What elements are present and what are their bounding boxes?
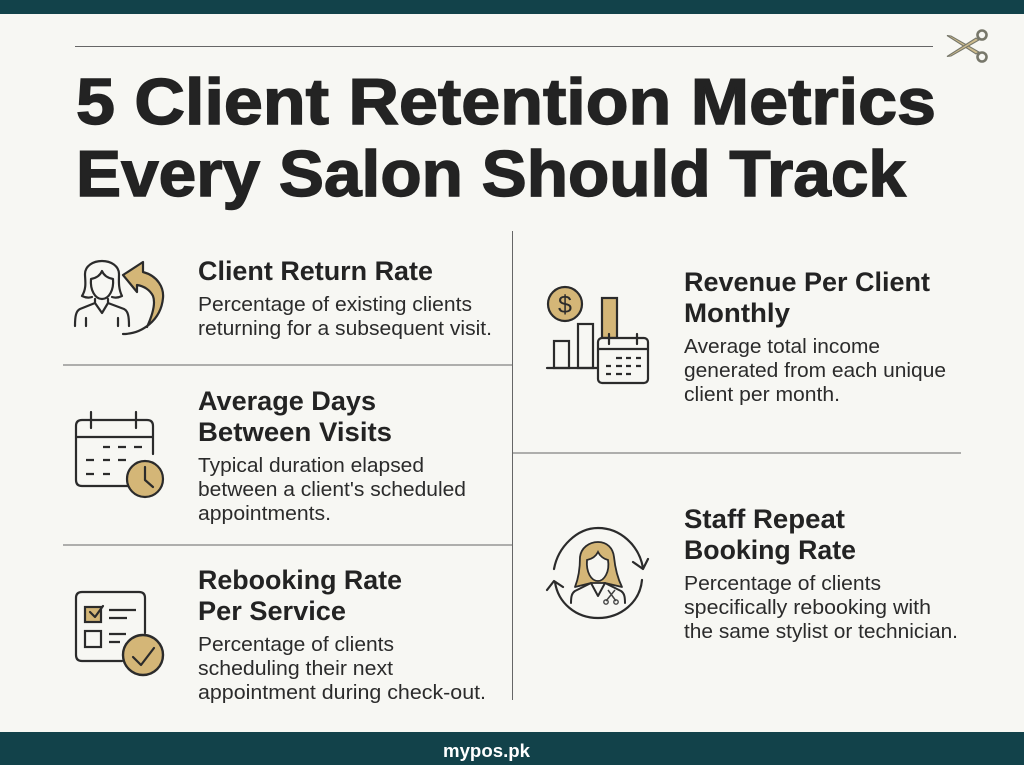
description — [198, 634, 486, 704]
icon: calendar with clock — [76, 412, 163, 497]
heading: Rebooking Rate — [198, 565, 402, 595]
description — [198, 455, 466, 525]
top bar — [0, 0, 1024, 14]
description: appointment during check-out. — [198, 682, 486, 704]
title — [76, 65, 936, 210]
description: Typical duration elapsed — [198, 455, 424, 477]
description: client per month. — [684, 384, 840, 406]
description: scheduling their next — [198, 658, 393, 680]
heading: Between Visits — [198, 417, 392, 447]
title: Every Salon Should Track — [76, 137, 907, 210]
heading: Client Return Rate — [198, 256, 433, 286]
heading — [198, 565, 402, 626]
heading: Revenue Per Client — [684, 267, 930, 297]
icon: client with return arrow — [75, 261, 163, 334]
panel: revenue per client monthly — [547, 267, 946, 406]
icon: coin, bars and calendar — [547, 287, 648, 383]
icon: stylist in circular arrows — [547, 528, 648, 618]
icon: scissors — [947, 30, 986, 62]
description: the same stylist or technician. — [684, 621, 958, 643]
description: appointments. — [198, 503, 331, 525]
icon: coin, bars and calendar: $ — [558, 291, 572, 319]
description: Percentage of existing clients — [198, 294, 472, 316]
footer bar — [0, 732, 1024, 765]
heading — [684, 504, 856, 565]
heading: Booking Rate — [684, 535, 856, 565]
description: between a client's scheduled — [198, 479, 466, 501]
description: returning for a subsequent visit. — [198, 318, 492, 340]
description: Average total income — [684, 336, 880, 358]
title: 5 Client Retention Metrics — [76, 65, 936, 138]
heading: Per Service — [198, 596, 346, 626]
heading — [684, 267, 930, 328]
heading: Average Days — [198, 386, 376, 416]
panel: client return rate — [75, 256, 492, 340]
description: generated from each unique — [684, 360, 946, 382]
panel: average days between visits — [76, 386, 466, 525]
icon: checklist with check badge — [76, 592, 163, 675]
panel: staff repeat booking rate — [547, 504, 958, 643]
description: Percentage of clients — [684, 573, 881, 595]
panel: rebooking rate per service — [76, 565, 486, 704]
footer bar: mypos.pk — [443, 741, 531, 761]
description — [198, 294, 492, 340]
description — [684, 573, 958, 643]
description — [684, 336, 946, 406]
description: specifically rebooking with — [684, 597, 931, 619]
heading: Staff Repeat — [684, 504, 845, 534]
heading: Monthly — [684, 298, 790, 328]
heading — [198, 386, 392, 447]
description: Percentage of clients — [198, 634, 394, 656]
